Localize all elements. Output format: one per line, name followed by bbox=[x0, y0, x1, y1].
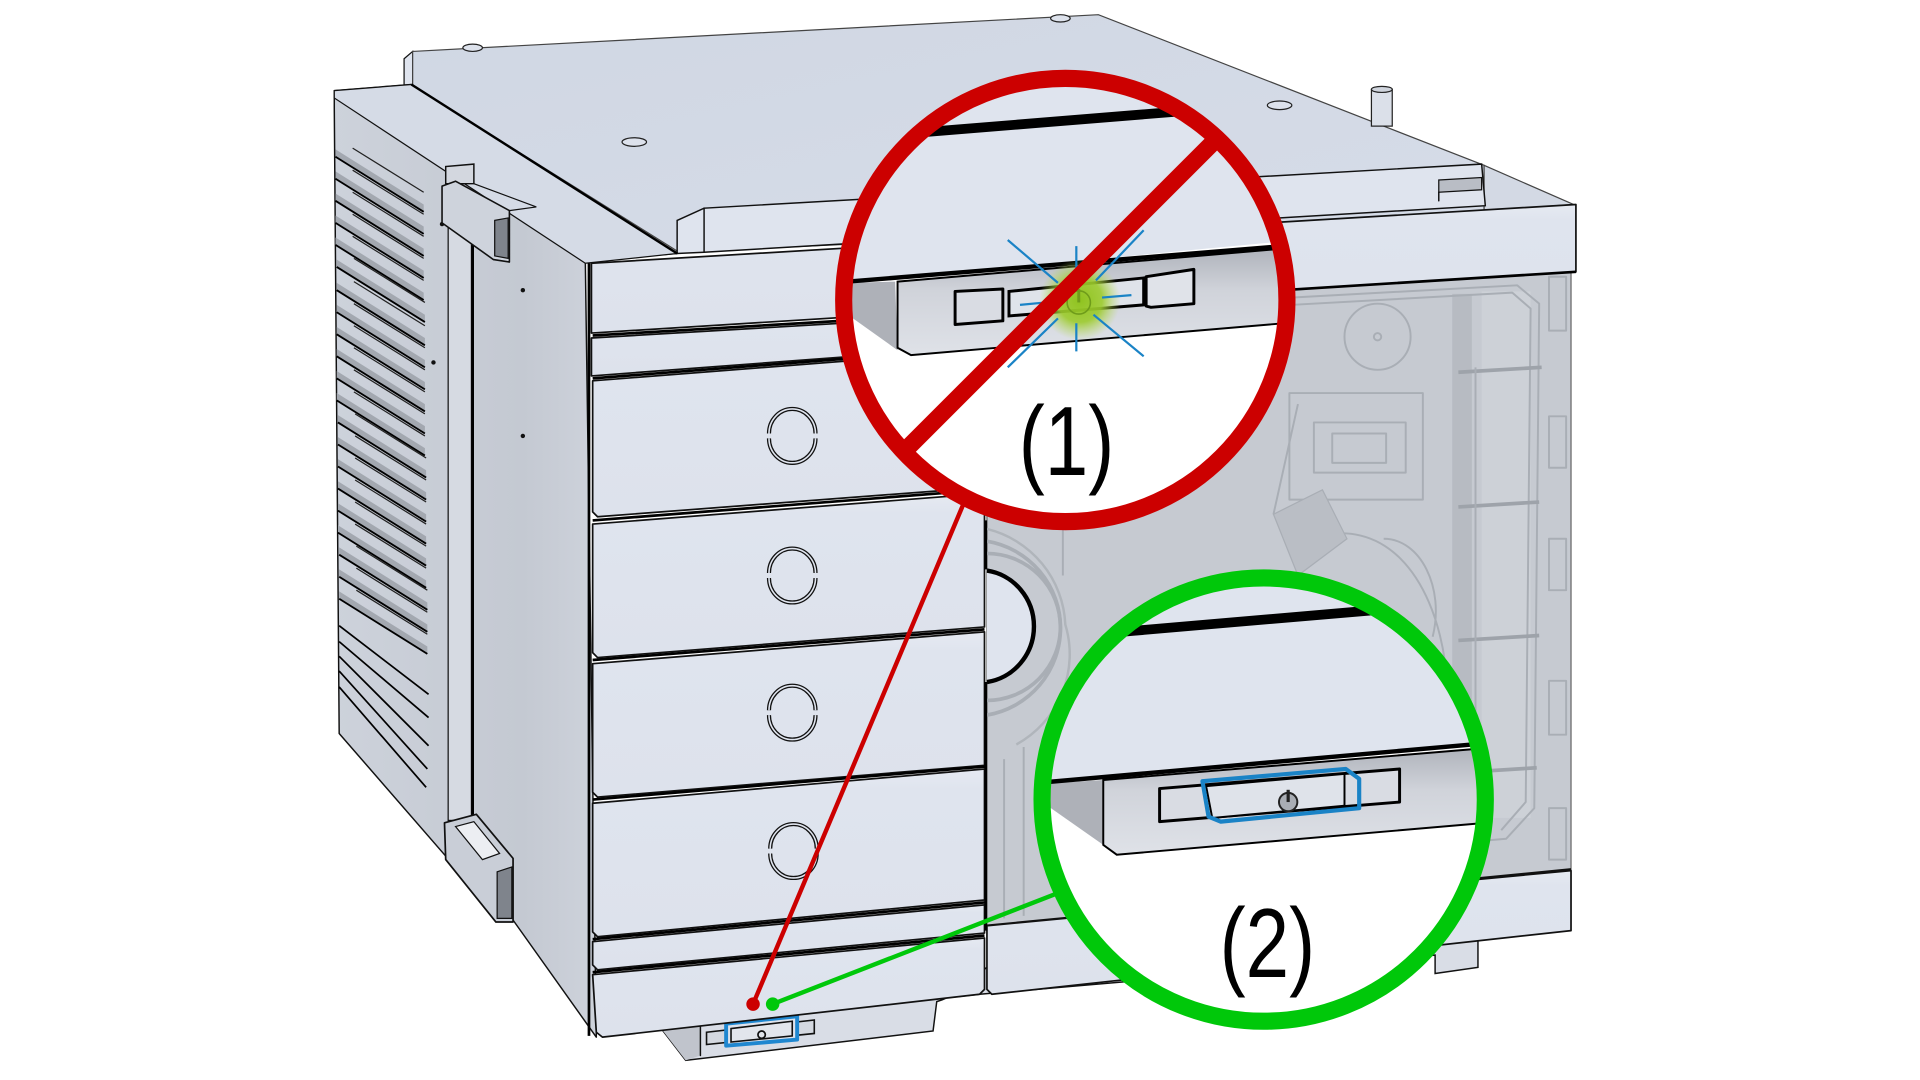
front second strip bbox=[591, 315, 987, 376]
small power switch on base bbox=[707, 1016, 814, 1046]
right top shoulder bbox=[1484, 165, 1573, 211]
ventilation slats bbox=[336, 148, 429, 787]
ring icons bbox=[769, 409, 817, 878]
rear small panel bbox=[404, 51, 413, 88]
magnified switch, lit bbox=[852, 87, 1278, 368]
drawer panel 1 bbox=[593, 350, 984, 517]
red ring bbox=[844, 78, 1287, 522]
magnified switch, off bbox=[1050, 586, 1477, 856]
round hub bbox=[987, 571, 1034, 682]
lid front lip bbox=[677, 164, 1485, 253]
lower bracket bbox=[444, 814, 513, 922]
callout 1: blinking switch prohibited bbox=[833, 61, 1298, 522]
red leader line bbox=[746, 495, 967, 1011]
label (1): (1) bbox=[1019, 386, 1114, 496]
base plinth bbox=[661, 939, 1478, 1060]
green leader line bbox=[766, 890, 1065, 1011]
instrument module illustration bbox=[334, 15, 1576, 1060]
drawer panel 3 bbox=[593, 632, 984, 797]
prohibition slash bbox=[904, 135, 1221, 452]
side column bbox=[431, 222, 525, 820]
drawer panel 6 bbox=[593, 938, 984, 1037]
green ring bbox=[1042, 578, 1485, 1021]
drawer panel 2 bbox=[593, 493, 984, 658]
label (2): (2) bbox=[1220, 888, 1315, 998]
front top strip bbox=[591, 204, 1576, 333]
drawer panel 4 bbox=[593, 769, 984, 937]
right door window bbox=[987, 272, 1571, 926]
lid pegs bbox=[463, 15, 1292, 146]
callout 2: correct switch state bbox=[1029, 563, 1500, 1021]
drawer panel 5 bbox=[593, 905, 984, 970]
rear post bbox=[1371, 86, 1392, 126]
upper bracket bbox=[442, 164, 536, 262]
right lower strip bbox=[987, 871, 1571, 994]
panel separators bbox=[589, 263, 1576, 1036]
top lid bbox=[413, 15, 1484, 251]
left side panel bbox=[334, 84, 677, 1037]
